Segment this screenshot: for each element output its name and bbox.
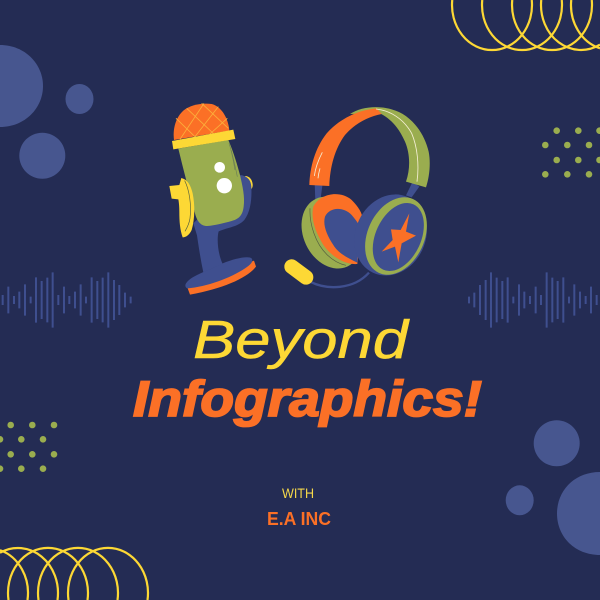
coil: bottom left <box>0 548 148 600</box>
headband green <box>350 107 430 187</box>
coil: top right <box>452 0 600 50</box>
mic body <box>178 140 244 226</box>
mic collar <box>172 130 235 149</box>
mic highlights <box>229 143 237 177</box>
icon: microphone <box>169 103 256 295</box>
mic rear knob <box>245 176 253 190</box>
sound wave: right <box>469 272 597 328</box>
label: WITH: WITH <box>282 486 314 501</box>
dots: right <box>542 127 600 178</box>
mic stand <box>193 175 251 272</box>
circles: top left <box>0 45 94 179</box>
headband orange <box>309 108 382 186</box>
title: Beyond: Beyond <box>193 310 410 370</box>
mic side dial <box>169 178 194 237</box>
right ear cup <box>341 182 440 288</box>
circles: bottom right <box>506 420 600 555</box>
sound wave: left <box>3 272 131 328</box>
mic capsule <box>292 267 306 277</box>
dots: left <box>0 422 57 472</box>
headphone connectors <box>315 182 419 201</box>
mic grille mesh <box>176 103 228 139</box>
star <box>382 213 416 262</box>
left ear cup <box>290 187 373 278</box>
mic base <box>185 257 252 288</box>
mic wire <box>311 273 369 287</box>
headband highlights <box>314 109 418 182</box>
icon: headphones <box>290 107 440 288</box>
mic grille <box>174 104 229 140</box>
mic base rim <box>187 261 256 295</box>
title: Infographics!: Infographics! <box>133 371 482 427</box>
label: E.A INC: E.A INC <box>267 509 331 529</box>
mic dots <box>214 162 225 173</box>
